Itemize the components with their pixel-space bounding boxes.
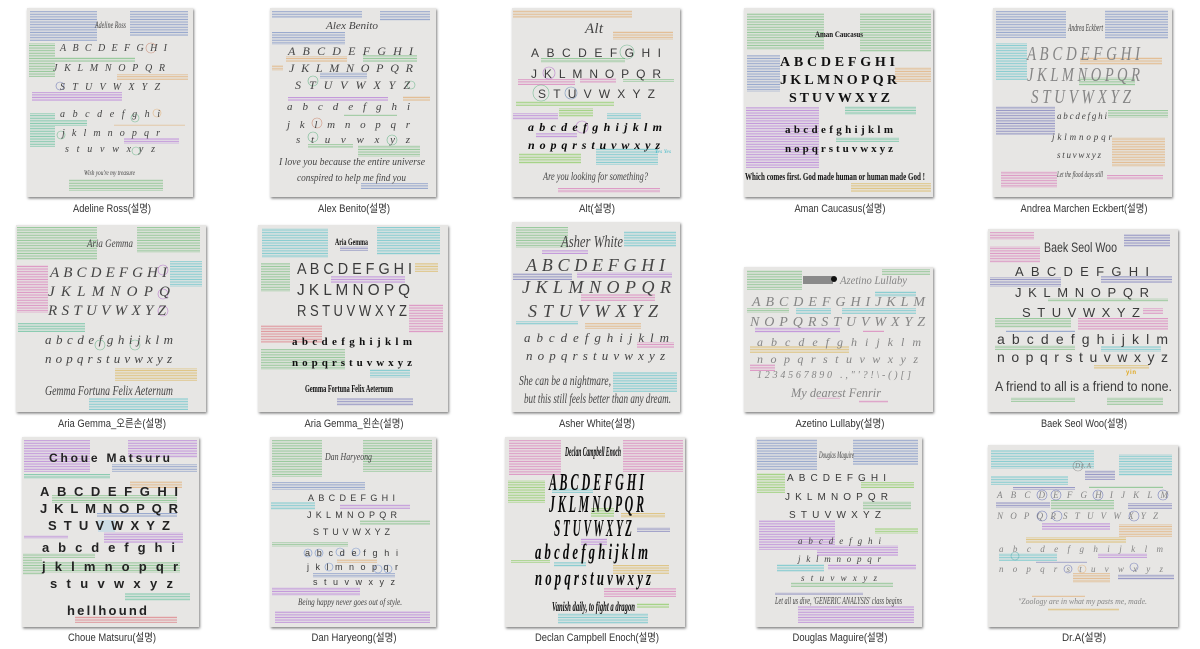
title: Dan Haryeong (324, 452, 372, 463)
annotation notes (272, 11, 430, 189)
alphabet specimen (785, 473, 888, 583)
alphabet specimen (997, 264, 1168, 365)
sample sentence: Let all us dive, 'GENERIC ANALYSIS' class begins (774, 596, 902, 607)
sheet (993, 8, 1172, 197)
alphabet specimen: STUVWXYZ (60, 82, 160, 93)
alphabet specimen (535, 470, 651, 590)
panel: Declan Campbell Enoch (505, 437, 685, 644)
sample sentence: hellhound (67, 603, 147, 618)
alphabet specimen: stuvwxyz (50, 576, 174, 591)
alphabet specimen: jklmnopqr (41, 559, 178, 574)
alphabet specimen: JKLMNOPQR (780, 73, 898, 88)
title: Adeline Ross (94, 20, 126, 30)
panel: Dr.A (988, 445, 1178, 644)
alphabet specimen (749, 295, 926, 381)
panel: Aria Gemma left hand (258, 225, 448, 430)
panel: Declan Campbell Enoch: Vanish daily, to fight a dragon (552, 600, 635, 615)
alphabet specimen: nopqrstuvwxyz (526, 348, 665, 363)
alphabet specimen: A B C D E F G H I (548, 470, 645, 496)
alphabet specimen: abcdefghi (798, 536, 881, 546)
panel: Azetino Lullaby (744, 267, 933, 430)
caption: Dr.A(설명) (1062, 631, 1106, 644)
title: Alex Benito (325, 20, 378, 32)
caption: Douglas Maguire(설명) (792, 631, 888, 644)
alphabet specimen: abcdefghijklm (997, 331, 1168, 347)
alphabet specimen: ABCDEFGHI (531, 46, 661, 60)
title: Aman Caucasus (815, 29, 864, 39)
panel: Alt (512, 8, 680, 215)
alphabet specimen: NOPQRSTUVWXYZ (996, 511, 1159, 521)
annotation notes (23, 440, 197, 623)
caption: Adeline Ross(설명) (73, 202, 151, 215)
sample sentence: but this still feels better than any dream. (524, 392, 671, 407)
panel: Asher White (512, 222, 680, 430)
alphabet specimen: JKLMNOPQR (40, 501, 179, 516)
alphabet specimen: ABCDEFGHI (308, 493, 395, 503)
alphabet specimen: JKLMNOPQR (785, 492, 888, 503)
sheet (22, 437, 199, 627)
alphabet specimen: STUVWXYZ (48, 518, 170, 533)
panel: Adeline Ross (27, 8, 193, 215)
annotation notes (746, 13, 931, 192)
sample sentence: Which comes first. God made human or human made God ! (745, 171, 925, 183)
sheet (16, 225, 206, 412)
caption: Andrea Marchen Eckbert(설명) (1020, 202, 1148, 215)
caption: Baek Seol Woo(설명) (1041, 417, 1127, 430)
alphabet specimen: nopqrstuvwxyz (292, 357, 412, 369)
sheet (258, 225, 448, 412)
caption: Dan Haryeong(설명) (312, 631, 396, 644)
annotation notes (757, 439, 918, 623)
title: Azetino Lullaby (839, 273, 908, 287)
alphabet specimen: stuvwxyz (296, 134, 411, 146)
annotation notes (991, 450, 1174, 611)
alphabet specimen: nopqrstuvwxyz (757, 352, 918, 366)
title scribble (803, 276, 833, 284)
sample sentence: I love you because the entire universe (278, 157, 426, 168)
alphabet specimen: ABCDEFGHIJKLM (751, 295, 926, 310)
alphabet specimen: nopqrstuvwxyz (45, 351, 172, 366)
sheet (270, 8, 436, 197)
alphabet specimen (53, 43, 168, 155)
alphabet specimen: JKLMNOPQR (522, 277, 671, 297)
alphabet specimen: JKLMNOPQR (53, 63, 165, 74)
alphabet specimen (780, 55, 898, 155)
caption: Alex Benito(설명) (318, 202, 390, 215)
alphabet specimen: jklmnopqr (60, 128, 160, 139)
caption: Aman Caucasus(설명) (794, 202, 886, 215)
annotation notes (990, 232, 1172, 405)
alphabet specimen: abcdefghi (1057, 111, 1107, 121)
annotation notes (508, 440, 683, 624)
sample sentence: Being happy never goes out of style. (298, 597, 402, 607)
annotation notes (261, 227, 443, 406)
alphabet specimen: nopqrstuvwxyz (528, 138, 660, 152)
sample sentence: She can be a nightmare, (519, 374, 611, 389)
alphabet specimen: abcdefghi (60, 109, 160, 120)
alphabet specimen: abcdefghijklm (757, 335, 921, 349)
title dot (831, 276, 837, 282)
sheet (756, 437, 922, 627)
annotation notes (996, 10, 1168, 188)
sheet (505, 437, 685, 627)
sheet (988, 445, 1178, 627)
annotation notes (29, 11, 188, 191)
alphabet specimen: ABCDEFGHI (59, 43, 168, 54)
alphabet specimen (1026, 43, 1141, 160)
alphabet specimen: STUVWXYZ (1022, 305, 1140, 320)
sample sentence: Gemma Fortuna Felix Aeternum (45, 384, 173, 399)
alphabet specimen: STUVWXYZ (295, 78, 410, 92)
panel: Dan Haryeong (270, 437, 436, 644)
alphabet specimen (40, 484, 179, 591)
alphabet specimen: ABCDEFGHI (40, 484, 178, 499)
alphabet specimen: 1234567890 .,"'?!\-()[] (757, 370, 911, 381)
alphabet specimen: J K L M N O P Q R (549, 492, 644, 518)
alphabet specimen: S T U V W X Y Z (1031, 86, 1132, 108)
alphabet specimen: jklmnopqr (797, 554, 881, 564)
alphabet specimen: RSTUVWXYZ (47, 303, 167, 319)
alphabet specimen: STUVWXYZ (538, 87, 655, 101)
caption: Asher White(설명) (559, 417, 635, 430)
sample sentence: conspired to help me find you (297, 173, 406, 184)
alphabet specimen: STUVWXYZ (528, 301, 659, 321)
alphabet specimen (522, 255, 671, 363)
alphabet specimen: abcdefghijklm (45, 332, 173, 347)
caption: Alt(설명) (579, 202, 615, 215)
annotation notes (17, 227, 202, 410)
sheet (270, 437, 436, 627)
alphabet specimen: STUVWXYZ (789, 91, 890, 106)
title: Douglas Maguire (818, 450, 854, 460)
alphabet specimen: J K L M N O P Q (297, 282, 410, 299)
alphabet specimen: ABCDEFGHI (49, 265, 168, 281)
alphabet specimen: abcdefghijklm (785, 124, 893, 136)
sheet (988, 229, 1178, 412)
title: Aria Gemma (335, 237, 368, 247)
alphabet specimen: stuvwxyz (313, 577, 396, 587)
panel: Declan Campbell Enoch: Declan Campbell Enoch (565, 445, 621, 460)
alphabet specimen: nopqrstuvwxyz (785, 143, 893, 155)
alphabet specimen: JKLMNOPQR (307, 510, 398, 520)
annotation notes (271, 440, 432, 623)
panel: Choue Matsuru (22, 437, 199, 644)
alphabet specimen: abcdefghijklm (999, 544, 1164, 554)
sheet (27, 8, 193, 197)
alphabet specimen (528, 46, 662, 152)
panel: Aman Caucasus (744, 8, 933, 215)
title: Andrea Eckbert (1067, 23, 1103, 34)
alphabet specimen: stuvwxyz (801, 573, 877, 583)
alphabet specimen (45, 265, 173, 366)
alphabet specimen: jklmnopqr (285, 119, 411, 131)
sample sentence: My dearest Fenrir (790, 385, 882, 400)
alphabet specimen: ABCDEFGHI (525, 255, 666, 275)
alphabet specimen: ABCDEFGHIJKLM (996, 490, 1168, 500)
alphabet specimen: nopqrstuvwxyz (999, 564, 1163, 574)
alphabet specimen: JKLMNOPQ (48, 284, 170, 300)
title: Choue Matsuru (49, 451, 170, 465)
annotation notes (513, 227, 677, 392)
caption: Aria Gemma_왼손(설명) (304, 416, 404, 430)
alphabet specimen: J K L M N O P Q R (1027, 64, 1140, 86)
sheet (744, 267, 933, 412)
sample sentence: Let the flood days still (1056, 170, 1104, 179)
title: Aria Gemma (86, 236, 133, 250)
alphabet specimen: abcdefghijklm (292, 336, 412, 348)
caption: Aria Gemma_오른손(설명) (58, 417, 166, 430)
alphabet specimen: A B C D E F G H I (297, 261, 412, 278)
panel: Aria Gemma right hand (16, 225, 206, 430)
sheet (512, 222, 680, 412)
alphabet specimen: JKLMNOPQR (289, 61, 414, 75)
alphabet specimen: ABCDEFGHI (287, 44, 414, 58)
alphabet specimen: abcdefghijklm (524, 330, 669, 345)
sample sentence (278, 157, 426, 184)
caption: Azetino Lullaby(설명) (796, 417, 884, 430)
sample sentence: A friend to all is a friend to none. (995, 378, 1172, 394)
alphabet specimen: NOPQRSTUVWXYZ (749, 315, 925, 330)
alphabet specimen: nopqrstuvwxyz (997, 349, 1168, 365)
sample sentence: Gemma Fortuna Felix Aeternum (305, 384, 393, 395)
alphabet specimen: ABCDEFGHI (780, 55, 895, 70)
alphabet specimen: jklmnopqr (306, 562, 398, 572)
title: Baek Seol Woo (1044, 239, 1117, 255)
alphabet specimen: ABCDEFGHI (787, 473, 886, 484)
alphabet specimen: STUVWXYZ (789, 510, 881, 521)
alphabet specimen: abcdefghi (305, 548, 398, 558)
alphabet specimen: S T U V W X Y Z (554, 516, 632, 542)
sheet (512, 8, 680, 197)
alphabet specimen: abcdefghijklm (528, 120, 662, 134)
alphabet specimen: abcdefghi (287, 101, 410, 113)
alphabet specimen: JKLMNOPQR (1015, 285, 1149, 300)
alphabet specimen: JKLMNOPQR (531, 67, 661, 81)
annotation notes (513, 10, 674, 193)
alphabet specimen: ABCDEFGHI (1015, 264, 1149, 279)
title: Asher White (560, 232, 623, 251)
yellow note: yin (1126, 370, 1136, 376)
panel: Baek Seol Woo (988, 229, 1178, 430)
panel: Andrea Marchen Eckbert (993, 8, 1172, 215)
alphabet specimen: A B C D E F G H I (1026, 43, 1141, 65)
alphabet specimen (292, 261, 412, 369)
annotation notes (747, 269, 930, 403)
panel: Douglas Maguire (756, 437, 922, 644)
alphabet specimen: jklmnopqr (1051, 132, 1112, 142)
alphabet specimen: R S T U V W X Y Z (297, 303, 407, 320)
alphabet specimen: STUVWXYZ (313, 527, 390, 537)
sample sentence (519, 374, 671, 407)
caption: Declan Campbell Enoch(설명) (535, 631, 659, 644)
alphabet specimen (285, 44, 414, 146)
sample sentence: Are you looking for something? (542, 169, 648, 183)
cyan scribble: Yes Yes (655, 150, 671, 155)
alphabet specimen: a b c d e f g h i j k l m (535, 539, 648, 564)
panel: Alex Benito (270, 8, 436, 215)
alphabet specimen: abcdefghi (42, 540, 175, 555)
sample sentence: "Zoology are in what my pasts me, made. (1018, 597, 1147, 606)
alphabet specimen (305, 493, 398, 587)
sheet (744, 8, 933, 197)
title: Alt (584, 21, 604, 37)
alphabet specimen: stuvwxyz (1057, 150, 1101, 160)
alphabet specimen: n o p q r s t u v w x y z (535, 565, 651, 590)
sample sentence: Wish you're my treasure (84, 169, 135, 177)
alphabet specimen (996, 490, 1168, 574)
alphabet specimen: stuvwxyz (65, 144, 155, 155)
caption: Choue Matsuru(설명) (68, 631, 156, 644)
title: Dr.A (1074, 462, 1092, 470)
